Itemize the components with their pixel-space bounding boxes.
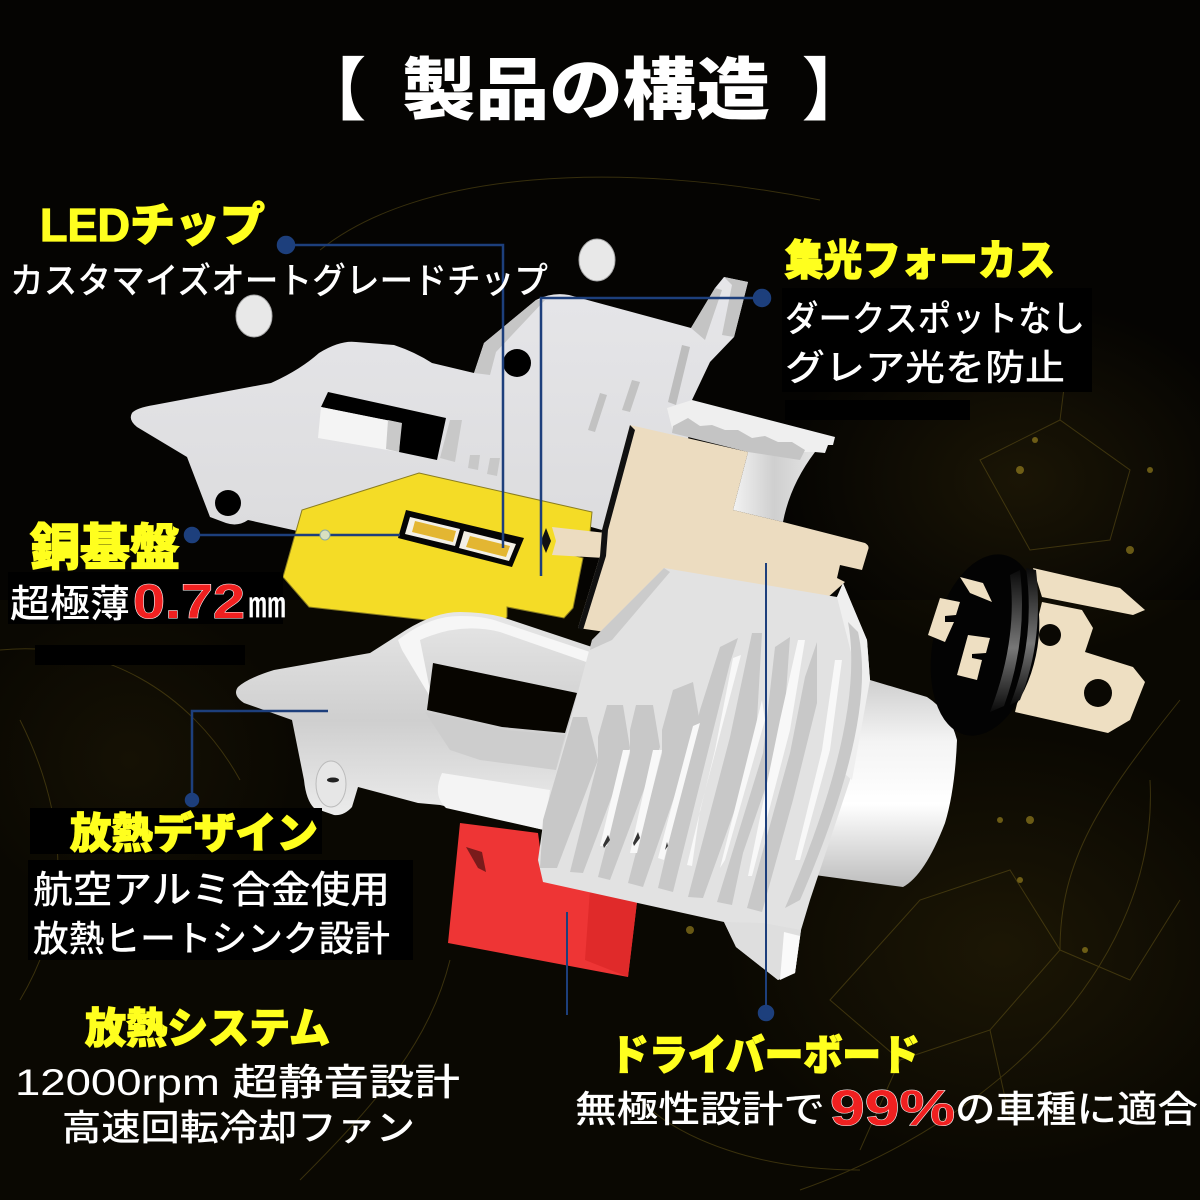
callout: driver board: 99% — [830, 1080, 955, 1136]
title: 】 — [802, 53, 870, 129]
callout: copper board: 超極薄 — [10, 584, 130, 626]
callout: cooling system: 12000rpm 超静音設計 — [15, 1062, 460, 1103]
dark seam — [578, 425, 635, 630]
yellow copper board — [283, 473, 592, 628]
callout: driver board: 無極性設計で — [575, 1089, 825, 1130]
callout: focus: 集光フォーカス — [785, 237, 1055, 284]
callout: focus: ダークスポットなし — [785, 298, 1085, 339]
beige board tongue — [552, 527, 606, 558]
callout: cooling system: 放熱システム — [85, 1005, 330, 1052]
decorative black label bars — [35, 400, 970, 665]
callout: copper board: 0.72 — [133, 576, 245, 629]
callout: copper board: ㎜ — [248, 584, 286, 625]
exploded LED bulb diagram — [131, 239, 1145, 980]
LED dome lens left — [236, 295, 272, 337]
leader lines — [185, 237, 773, 1020]
LED chips — [398, 510, 524, 567]
callout: cooling system — [15, 1005, 460, 1148]
callout: driver board — [575, 1032, 1198, 1136]
callout: heat dissipation design: 放熱ヒートシンク設計 — [33, 918, 390, 959]
LED dome lens right — [579, 239, 615, 281]
callout: cooling system: 高速回転冷却ファン — [62, 1107, 415, 1148]
callout: LED chip: LEDチップ — [40, 199, 265, 251]
title: 【 — [298, 53, 366, 129]
callout: driver board: の車種に適合 — [955, 1089, 1198, 1130]
callout: focus: グレア光を防止 — [785, 347, 1065, 388]
callout: heat dissipation design: 航空アルミ合金使用 — [33, 870, 390, 912]
finned heat sink — [538, 568, 870, 980]
callout: driver board: ドライバーボード — [610, 1032, 920, 1079]
callout: LED chip: カスタマイズオートグレードチップ — [10, 260, 548, 301]
callout: copper board: 銅基盤 — [30, 520, 180, 576]
beige driver board — [578, 425, 869, 640]
connector plug — [915, 544, 1145, 746]
lower housing shell — [236, 612, 620, 830]
title: 製品の構造 — [402, 53, 770, 129]
upper housing shell — [131, 277, 748, 532]
callout: heat dissipation design: 放熱デザイン — [70, 810, 318, 857]
cylinder base — [800, 680, 957, 887]
callout: focus — [782, 237, 1092, 392]
housing rear rim — [667, 400, 835, 522]
callout: copper board — [8, 520, 286, 629]
callout: heat dissipation design — [28, 808, 413, 960]
red cooling fan — [448, 823, 637, 977]
callout: LED chip — [10, 199, 548, 301]
